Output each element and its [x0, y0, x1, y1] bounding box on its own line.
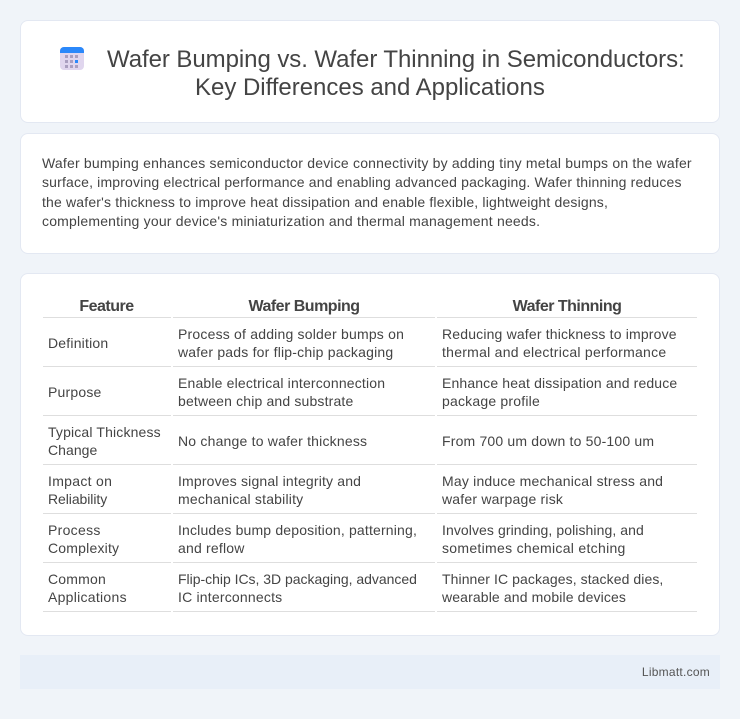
row: common applications: Applications [48, 589, 127, 605]
row: impact on reliability: wafer warpage risk [442, 491, 563, 507]
row: typical thickness change: Change [48, 442, 97, 458]
header row: Wafer Thinning [513, 298, 621, 315]
row: impact on reliability [48, 473, 663, 507]
row: common applications: wearable and mobile devices [442, 589, 626, 605]
description card [20, 133, 720, 254]
row: process complexity: Process [48, 522, 101, 538]
row: impact on reliability: Impact on [48, 473, 112, 489]
title: Wafer Bumping vs. Wafer Thinning in Semiconductors: [107, 46, 685, 73]
row: purpose: package profile [442, 393, 540, 409]
footer [20, 655, 720, 689]
row: definition [48, 326, 677, 360]
row: process complexity [48, 522, 644, 556]
row: typical thickness change: No change to wafer thickness [178, 433, 367, 449]
row: impact on reliability: Reliability [48, 491, 107, 507]
header row: Feature [79, 298, 134, 315]
row: definition: Definition [48, 335, 108, 351]
row: purpose [48, 375, 677, 409]
row: definition: thermal and electrical performance [442, 344, 666, 360]
row: common applications: Common [48, 571, 106, 587]
row: impact on reliability: mechanical stability [178, 491, 303, 507]
description text: complementing your device's miniaturization and thermal management needs. [42, 213, 540, 229]
row: process complexity: Includes bump deposition, patterning, [178, 522, 417, 538]
row: impact on reliability: May induce mechanical stress and [442, 473, 663, 489]
icon: calendar [60, 47, 84, 70]
description text: surface, improving electrical performance and enabling advanced packaging. Wafer thinning reduces [42, 174, 682, 190]
row: typical thickness change: Typical Thickness [48, 424, 161, 440]
row: purpose: Purpose [48, 384, 102, 400]
header row: Wafer Bumping [248, 298, 360, 315]
row: definition: Reducing wafer thickness to improve [442, 326, 677, 342]
row: common applications: IC interconnects [178, 589, 282, 605]
title: Key Differences and Applications [195, 74, 545, 101]
row: common applications: Thinner IC packages, stacked dies, [442, 571, 663, 587]
description text: the wafer's thickness to improve heat dissipation and enable flexible, lightweight designs, [42, 194, 608, 210]
title card [20, 20, 720, 123]
description text: Wafer bumping enhances semiconductor device connectivity by adding tiny metal bumps on the wafer [42, 155, 692, 171]
row: common applications: Flip-chip ICs, 3D packaging, advanced [178, 571, 417, 587]
description text [42, 155, 692, 229]
footer credit: Libmatt.com [642, 665, 710, 679]
row: process complexity: and reflow [178, 540, 245, 556]
row: purpose: between chip and substrate [178, 393, 353, 409]
row: process complexity: sometimes chemical etching [442, 540, 626, 556]
row: typical thickness change [48, 424, 654, 458]
row: common applications [48, 571, 663, 605]
comparison table card [20, 273, 720, 636]
row: purpose: Enhance heat dissipation and reduce [442, 375, 677, 391]
row: impact on reliability: Improves signal integrity and [178, 473, 361, 489]
row: definition: wafer pads for flip-chip packaging [178, 344, 393, 360]
row: definition: Process of adding solder bumps on [178, 326, 404, 342]
row: process complexity: Complexity [48, 540, 119, 556]
row: purpose: Enable electrical interconnection [178, 375, 385, 391]
header row [79, 298, 621, 315]
row: typical thickness change: From 700 um down to 50-100 um [442, 433, 654, 449]
title [107, 46, 685, 101]
row: process complexity: Involves grinding, polishing, and [442, 522, 644, 538]
